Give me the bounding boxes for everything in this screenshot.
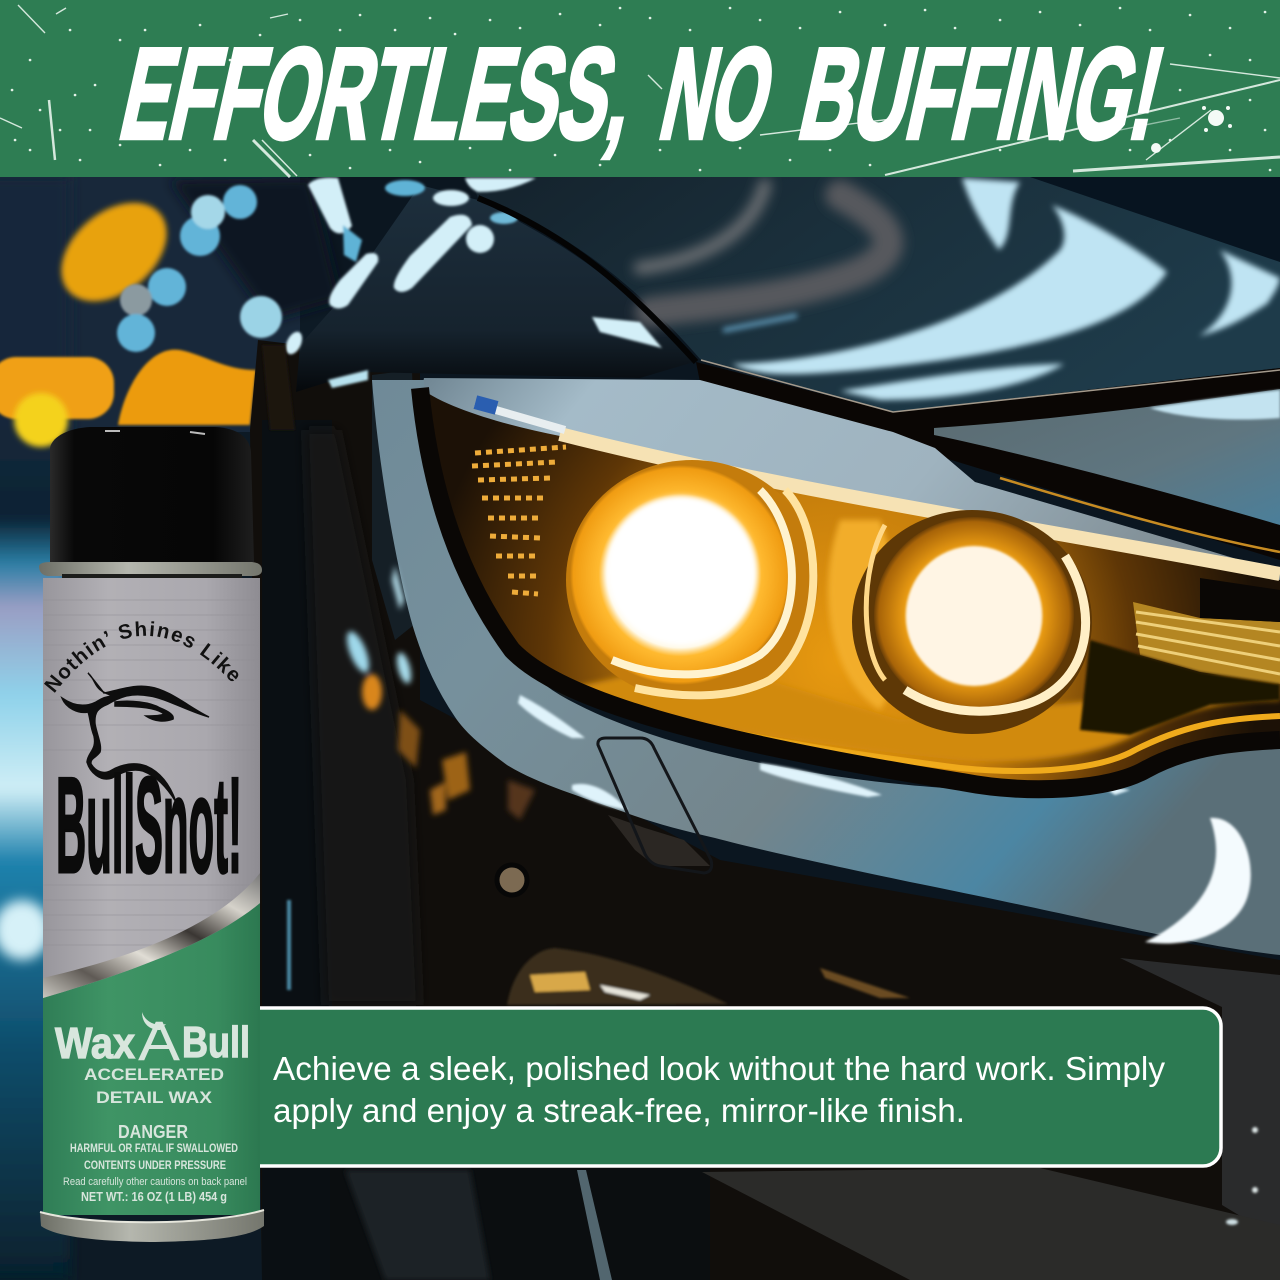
amber bokeh lights — [0, 183, 256, 447]
product name: Bull — [182, 1018, 250, 1067]
product details: DANGER — [118, 1122, 188, 1142]
blurred left background — [0, 177, 340, 1280]
left body columns — [262, 370, 710, 1280]
headlight housing — [420, 388, 1280, 789]
title: NO — [650, 21, 787, 166]
banner speck burst — [1151, 106, 1232, 153]
neck ring — [39, 562, 262, 576]
product details: Read carefully other cautions on back panel — [63, 1176, 247, 1188]
cap highlights — [105, 431, 205, 434]
blue bokeh dots — [117, 185, 282, 352]
can base ring — [40, 1210, 264, 1242]
product details: ACCELERATED — [84, 1065, 224, 1084]
callout panel — [230, 1008, 1221, 1166]
black gap under hood — [696, 362, 1280, 560]
headlight brow strip — [420, 378, 1280, 590]
top banner — [0, 0, 1280, 177]
product details: CONTENTS UNDER PRESSURE — [84, 1160, 226, 1172]
can label green area — [43, 903, 260, 1215]
can label silver area — [43, 578, 260, 1000]
upper right body panel — [934, 389, 1280, 525]
can cap — [50, 427, 254, 562]
chrome upper trim — [560, 434, 1280, 574]
product: aerosol can — [39, 427, 264, 1242]
turn signal LED cluster — [472, 447, 566, 594]
text: BullSnot! — [56, 749, 242, 901]
top right dark corner — [1030, 177, 1280, 262]
hood panel — [470, 177, 1280, 412]
mirror and pillar streaks — [283, 178, 662, 388]
label horizontal streaks — [43, 600, 260, 945]
side reflections on dark body — [342, 565, 535, 820]
product details — [63, 1065, 247, 1204]
product details: NET WT.: 16 OZ (1 LB) 454 g — [81, 1190, 227, 1204]
lower reflections — [507, 948, 1258, 1225]
product name: A — [138, 1009, 181, 1072]
gold inner edge — [430, 455, 1280, 771]
small projector lamp — [828, 510, 1092, 734]
gold edge line — [1000, 478, 1280, 552]
callout text: Achieve a sleek, polished look without the hard work. Simply — [273, 1051, 1165, 1088]
arched slogan: Nothin’ Shines Like — [44, 621, 238, 693]
fender panel — [372, 380, 1280, 955]
chrome swoosh — [43, 873, 260, 998]
banner scratch texture — [0, 5, 1280, 177]
hood edge lines — [478, 198, 696, 362]
callout text: apply and enjoy a streak-free, mirror-like finish. — [273, 1093, 965, 1130]
product details: HARMFUL OR FATAL IF SWALLOWED — [70, 1143, 238, 1155]
lower gray panel — [702, 1168, 1280, 1280]
product name: Wax — [55, 1019, 135, 1068]
bull logo — [62, 673, 209, 802]
title: EFFORTLESS, — [110, 21, 649, 166]
big projector lamp — [566, 460, 818, 700]
mirror body — [296, 185, 694, 392]
product name — [55, 1009, 250, 1072]
dark car side — [250, 340, 1280, 1280]
black outer trim — [420, 388, 1280, 789]
banner speck texture — [12, 8, 1270, 170]
product details: DETAIL WAX — [96, 1088, 213, 1107]
parking sensor — [497, 865, 527, 895]
lower right trim surface — [1120, 958, 1280, 1240]
fender highlights — [518, 695, 1251, 944]
hood swirl reflections — [640, 185, 888, 330]
pillar reflections — [262, 345, 295, 430]
dark housing behind reflector — [1080, 640, 1280, 735]
sensor flap — [598, 738, 712, 873]
side reflector — [1133, 602, 1280, 684]
hood highlights — [732, 178, 1280, 400]
